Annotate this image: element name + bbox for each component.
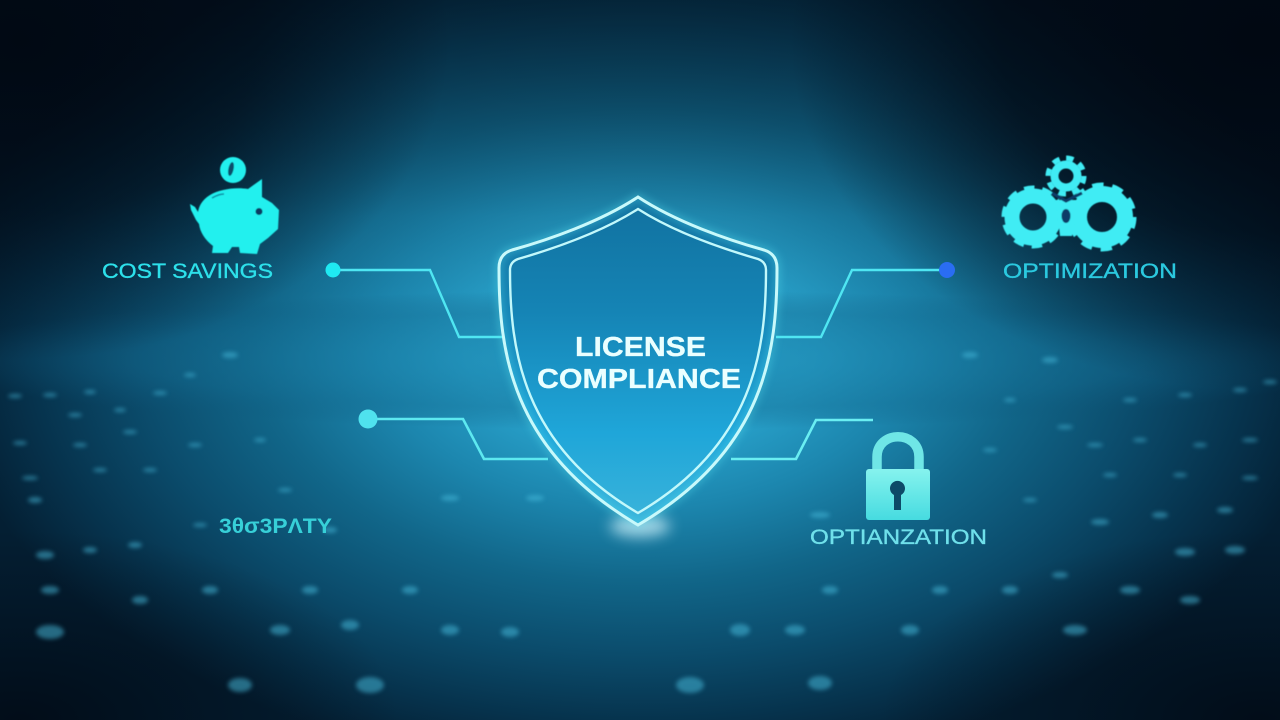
- shield title: COMPLIANCE: [537, 363, 741, 394]
- connector: lower left: [358, 410, 548, 459]
- dotted digital floor: [8, 352, 1277, 693]
- connector: optimization: [776, 262, 955, 337]
- connector: cost savings: [326, 262, 502, 337]
- label: lower left: 3θσ3PΛTY: [219, 515, 332, 538]
- connector: lock: [731, 420, 873, 459]
- shield: [499, 197, 777, 525]
- connector dot: cost savings: [326, 262, 340, 278]
- label: cost savings: COST SAVINGS: [102, 260, 273, 283]
- icon: padlock: [866, 437, 930, 520]
- top gear: [1048, 158, 1084, 194]
- label: optimization: OPTIMIZATION: [1003, 260, 1177, 283]
- shield title: LICENSE: [575, 331, 706, 362]
- keyhole: [890, 481, 905, 510]
- connector dot: optimization: [939, 262, 955, 278]
- connector dot: lower left: [358, 410, 378, 428]
- centre glow under shield: [610, 515, 670, 537]
- icon: piggy bank: [190, 157, 279, 254]
- left gear: [1005, 189, 1061, 245]
- coin: [220, 157, 246, 183]
- label: lock optimization: OPTIANZATION: [810, 526, 987, 549]
- gear junction: [1052, 193, 1082, 236]
- right gear: [1071, 186, 1133, 248]
- icon: gears: [1005, 158, 1133, 248]
